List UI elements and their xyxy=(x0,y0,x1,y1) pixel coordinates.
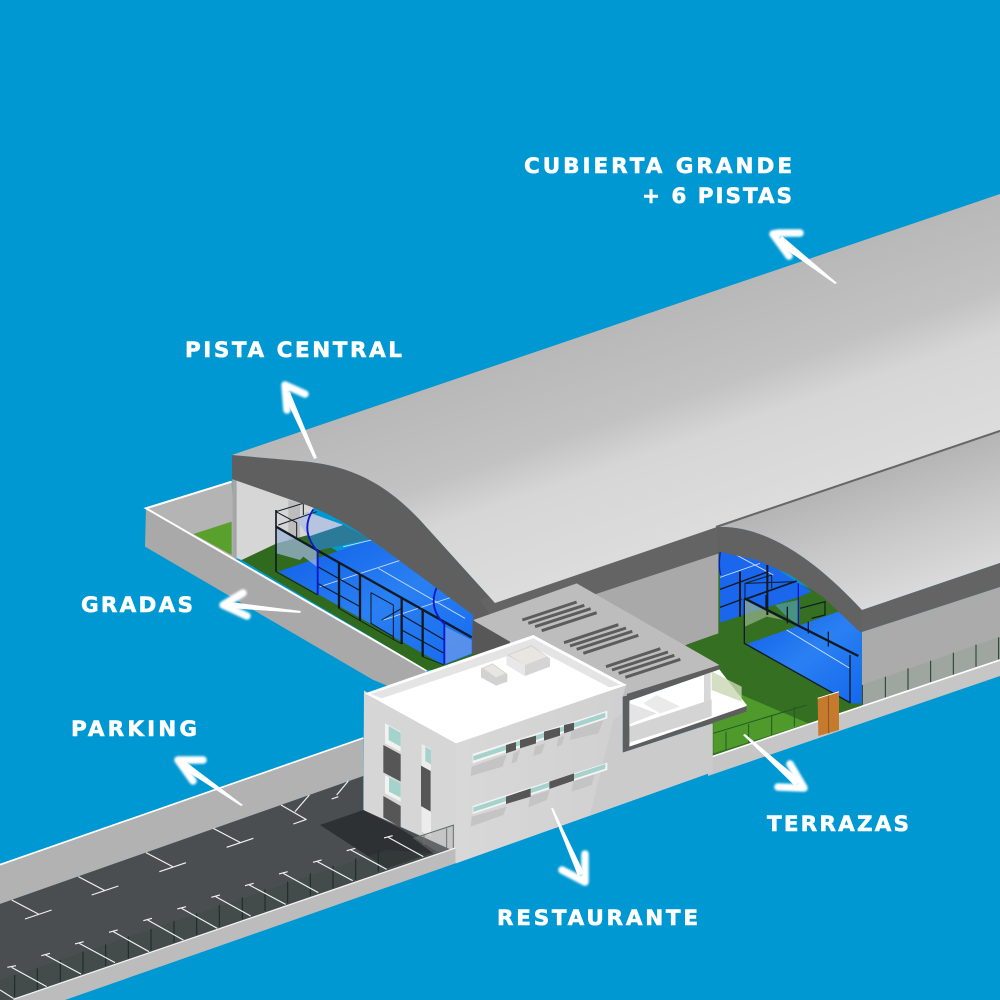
wooden door xyxy=(818,692,839,736)
wall below main roof xyxy=(590,553,720,650)
label: terrazas: TERRAZAS xyxy=(767,812,909,837)
arrow: cubierta grande xyxy=(773,233,837,284)
upper bay markings xyxy=(12,781,348,919)
terrace xyxy=(623,665,747,753)
side wall xyxy=(363,691,456,863)
right hall wall xyxy=(862,563,1000,708)
parking back wall xyxy=(0,738,363,904)
cubierta grande roof xyxy=(232,194,1000,603)
asphalt xyxy=(0,776,455,1000)
right boundary curb xyxy=(708,660,1000,776)
upper roof slab with vents xyxy=(472,583,719,698)
pista central court xyxy=(232,479,487,670)
restaurant building xyxy=(363,583,747,863)
front windows lower xyxy=(471,763,607,827)
building shadow xyxy=(320,810,437,868)
lower bay markings xyxy=(0,836,423,998)
second roof arch xyxy=(717,527,862,632)
second roof xyxy=(716,430,1000,610)
label: gradas: GRADAS xyxy=(81,593,193,618)
label: parking: PARKING xyxy=(71,717,197,742)
front wall xyxy=(456,683,713,863)
gradas enclosure xyxy=(145,482,440,707)
label: 6 pistas: + 6 PISTAS xyxy=(642,184,792,209)
arrow: parking xyxy=(178,760,243,806)
arrow: gradas xyxy=(223,593,301,616)
white roof xyxy=(365,635,627,743)
pista central arch xyxy=(232,455,510,640)
front windows upper xyxy=(471,711,607,776)
label: cubierta grande: CUBIERTA GRANDE xyxy=(524,154,792,179)
right fence xyxy=(713,637,1000,750)
parking xyxy=(0,738,455,1000)
label: pista central: PISTA CENTRAL xyxy=(185,338,402,363)
arrow: pista central xyxy=(284,385,317,459)
lower bay fence xyxy=(0,825,454,1000)
arrow: terrazas xyxy=(743,734,804,788)
right courts xyxy=(673,550,862,757)
arrow: restaurante xyxy=(551,808,585,882)
main roof band xyxy=(480,520,720,630)
parking front curb xyxy=(13,848,455,1000)
left wall windows xyxy=(383,723,431,837)
label: restaurante: RESTAURANTE xyxy=(497,906,698,931)
